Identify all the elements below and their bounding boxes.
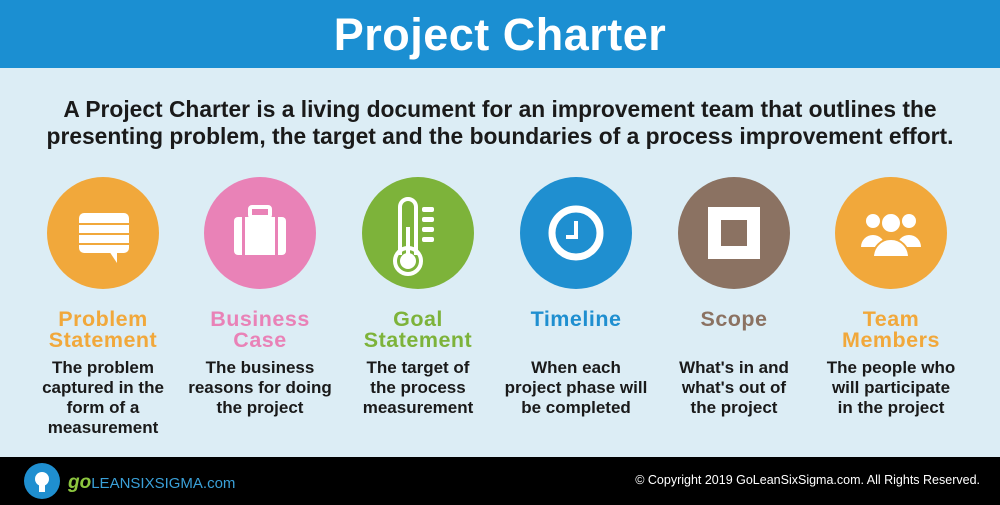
- item: business case: Business: [210, 307, 310, 331]
- item: problem statement: [42, 177, 164, 437]
- item: scope: Scope: [700, 307, 768, 331]
- item: scope: the project: [691, 398, 777, 417]
- item: goal statement: Statement: [364, 328, 472, 352]
- item: goal statement: the process: [370, 378, 466, 397]
- item: problem statement: Statement: [49, 328, 157, 352]
- item: goal statement: The target of: [367, 358, 469, 377]
- item: business case: Case: [233, 328, 287, 352]
- item: team members: [826, 177, 955, 417]
- item: scope: what's out of: [682, 378, 786, 397]
- item: problem statement: Problem: [58, 307, 148, 331]
- item: timeline: project phase will: [505, 378, 647, 397]
- footer: [0, 457, 1000, 505]
- item: scope: [678, 177, 790, 417]
- item: goal statement: measurement: [363, 398, 473, 417]
- icon: briefcase: [204, 177, 316, 289]
- item: goal statement: Goal: [393, 307, 443, 331]
- icon: speech bubble: [47, 177, 159, 289]
- copyright: © Copyright 2019 GoLeanSixSigma.com. All Rights Reserved.: [635, 473, 980, 487]
- item: team members: The people who: [827, 358, 955, 377]
- footer logo: [24, 463, 235, 499]
- item: business case: [188, 177, 332, 417]
- intro text: A Project Charter is a living document for an improvement team that outlines the: [63, 96, 937, 122]
- icon: people: [835, 177, 947, 289]
- icon: square frame: [678, 177, 790, 289]
- footer logo: goLEANSIXSIGMA.com: [68, 472, 235, 493]
- item: problem statement: measurement: [48, 418, 158, 437]
- item: team members: in the project: [838, 398, 944, 417]
- item: timeline: Timeline: [531, 307, 621, 331]
- item: timeline: When each: [531, 358, 621, 377]
- item: business case: the project: [217, 398, 303, 417]
- intro text: presenting problem, the target and the boundaries of a process improvement effort.: [47, 123, 953, 149]
- item: timeline: be completed: [521, 398, 631, 417]
- item: problem statement: captured in the: [42, 378, 164, 397]
- item: team members: Members: [842, 328, 940, 352]
- item: goal statement: [362, 177, 474, 417]
- item: problem statement: form of a: [67, 398, 139, 417]
- header: Project Charter: [334, 9, 666, 60]
- item: problem statement: The problem: [52, 358, 154, 377]
- item: scope: What's in and: [679, 358, 789, 377]
- icon: thermometer: [362, 177, 474, 289]
- item: business case: reasons for doing: [188, 378, 332, 397]
- header: [0, 0, 1000, 68]
- item: team members: Team: [863, 307, 919, 331]
- item: business case: The business: [206, 358, 314, 377]
- intro text: [47, 96, 953, 149]
- icon: clock: [520, 177, 632, 289]
- item: team members: will participate: [832, 378, 950, 397]
- item: timeline: [505, 177, 647, 417]
